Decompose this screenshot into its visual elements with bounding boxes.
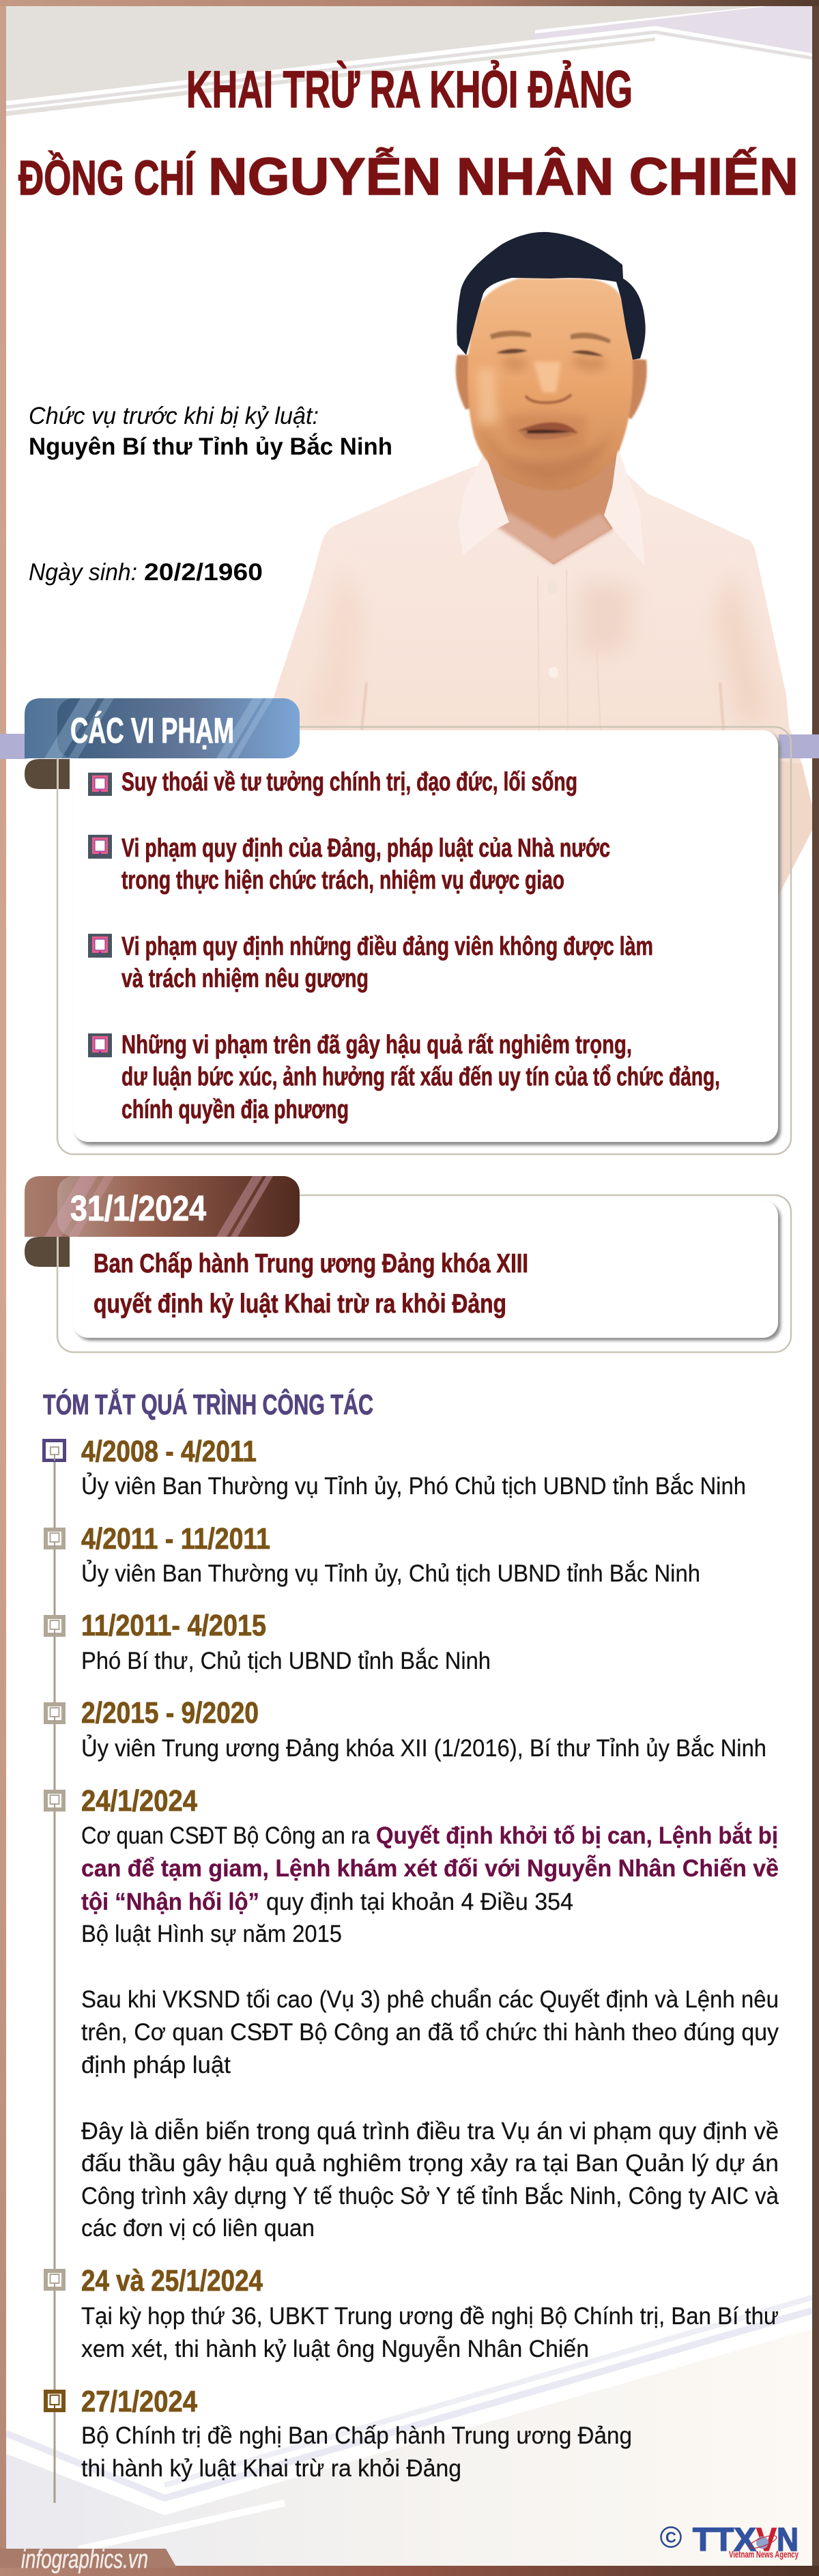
entry 5: Công trình xây dựng Y tế thuộc Sở Y tế tỉnh Bắc Ninh, Công ty AIC và [81,2183,779,2209]
panel: decision [57,1195,791,1352]
entry 4 [81,1696,766,1762]
text: birth date [29,559,263,586]
entry 3: Phó Bí thư, Chủ tịch UBND tỉnh Bắc Ninh [81,1648,491,1674]
neck [483,437,621,564]
text: item 4 [121,1031,720,1124]
entry 2: 4/2011 - 11/2011 [81,1522,270,1556]
icon: bullet 4 [88,1033,112,1057]
text: decision [94,1249,528,1319]
entry 6: 24 và 25/1/2024 [81,2264,263,2298]
text: position: Chức vụ trước khi bị kỷ luật: [29,403,319,429]
entry 6: Tại kỳ họp thứ 36, UBKT Trung ương đề nghị Bộ Chính trị, Ban Bí thư [81,2303,779,2330]
node 7 [46,2392,63,2410]
entry 3 [81,1609,491,1674]
text: item 4: Những vi phạm trên đã gây hậu quả rất nghiêm trọng, [121,1031,632,1059]
shirt [266,461,816,895]
logo: TTXVN: N [777,2522,799,2558]
facial features [490,330,611,440]
entry 7: thi hành kỷ luật Khai trừ ra khỏi Đảng [81,2455,461,2482]
tab: violations heading [25,698,300,789]
text: position: Nguyên Bí thư Tỉnh ủy Bắc Ninh [29,433,392,460]
entry 5: Sau khi VKSND tối cao (Vụ 3) phê chuẩn các Quyết định và Lệnh nêu [81,1986,779,2013]
text: item 2: trong thực hiện chức trách, nhiệm vụ được giao [121,866,564,895]
text: item 1: Suy thoái về tư tưởng chính trị, đạo đức, lối sống [121,768,577,797]
entry 5: định pháp luật [81,2052,231,2078]
entry 5: Đây là diễn biến trong quá trình điều tra Vụ án vi phạm quy định về [81,2118,779,2145]
entry 2 [81,1522,700,1587]
heading: career summary: TÓM TẮT QUÁ TRÌNH CÔNG TÁC [43,1388,373,1420]
node 1 [44,1440,64,1461]
entry 4: Ủy viên Trung ương Đảng khóa XII (1/2016), Bí thư Tỉnh ủy Bắc Ninh [81,1734,766,1762]
text: decision: Ban Chấp hành Trung ương Đảng khóa XIII [94,1249,528,1278]
title: KHAI TRỪ RA KHỎI ĐẢNG [186,61,633,119]
bottom background shapes [6,2298,812,2566]
date text: 31/1/2024 [70,1189,206,1229]
portrait photo [266,232,816,895]
text: birth date: Ngày sinh: [29,559,137,586]
node 2 [46,1530,63,1547]
text: birth date: 20/2/1960 [144,559,263,586]
tab: decision date [25,1176,300,1267]
text: item 3: Vi phạm quy định những điều đảng viên không được làm [121,932,653,961]
text: item 2 [121,834,610,895]
node 6 [46,2271,63,2289]
node 4 [46,1704,63,1722]
bullet list: violations [88,768,720,1124]
timeline axis [53,1461,56,2503]
entry 5: 24/1/2024 [81,1784,197,1818]
shirt shading [307,560,768,724]
text: item 3: và trách nhiệm nêu gương [121,964,369,993]
entry 1: 4/2008 - 4/2011 [81,1435,257,1468]
entry 6: xem xét, thi hành kỷ luật ông Nguyễn Nhân Chiến [81,2336,589,2362]
ears [456,355,478,410]
title: ĐỒNG CHÍ [18,152,196,205]
entry 4: 2/2015 - 9/2020 [81,1696,259,1730]
entry 5: Cơ quan CSĐT Bộ Công an ra [81,1822,370,1849]
logo: TTXVN: V [756,2522,777,2558]
lavender bands [0,734,819,759]
entry 5: đấu thầu gây hậu quả nghiêm trọng xảy ra tại Ban Quản lý dự án [81,2150,779,2177]
panel: violations [57,727,791,1154]
entry 2: Ủy viên Ban Thường vụ Tỉnh ủy, Chủ tịch UBND tỉnh Bắc Ninh [81,1560,700,1587]
node 5 [46,1792,63,1809]
entry 3: 11/2011- 4/2015 [81,1609,266,1642]
title [18,61,799,206]
text: item 3 [121,932,653,993]
shirt buttons [547,580,558,678]
entry 5: quy định tại khoản 4 Điều 354 [266,1889,573,1915]
text: decision: quyết định kỷ luật Khai trừ ra khỏi Đảng [94,1289,506,1319]
entry 5: các đơn vị có liên quan [81,2215,315,2242]
entry 7: Bộ Chính trị đề nghị Ban Chấp hành Trung ương Đảng [81,2422,632,2449]
logo: TTXVN [661,2522,799,2560]
entry 1 [81,1435,746,1500]
icon: bullet 2 [88,835,112,859]
node 3 [46,1617,63,1635]
entry 6 [81,2264,779,2362]
collar [459,452,509,555]
heading text: CÁC VI PHẠM [70,711,234,751]
timeline [44,1435,779,2503]
logo: TTXVN: C [665,2529,676,2546]
entry 5: can để tạm giam, Lệnh khám xét đối với Nguyễn Nhân Chiến về [81,1855,779,1882]
hair [457,232,646,360]
face shading [478,356,614,482]
footer tag: infographics.vn: infographics.vn [21,2545,148,2574]
text: position [29,403,392,460]
entry 7 [81,2385,632,2482]
logo: TTXVN: TTX [693,2522,756,2558]
entry 5: Bộ luật Hình sự năm 2015 [81,1921,342,1947]
face [468,278,633,490]
entry 5 [81,1784,779,2242]
text: item 4: chính quyền địa phương [121,1096,349,1124]
entry 7: 27/1/2024 [81,2385,197,2418]
icon: bullet 3 [88,934,112,958]
text: item 2: Vi phạm quy định của Đảng, pháp luật của Nhà nước [121,834,610,863]
entry 1: Ủy viên Ban Thường vụ Tỉnh ủy, Phó Chủ tịch UBND tỉnh Bắc Ninh [81,1472,746,1500]
entry 5: trên, Cơ quan CSĐT Bộ Công an đã tổ chức thi hành theo đúng quy [81,2019,779,2046]
entry 5: Quyết định khởi tố bị can, Lệnh bắt bị [376,1822,778,1849]
entry 5: tội “Nhận hối lộ” [81,1889,259,1915]
icon: bullet 1 [88,773,112,796]
title: NGUYỄN NHÂN CHIẾN [208,147,799,206]
